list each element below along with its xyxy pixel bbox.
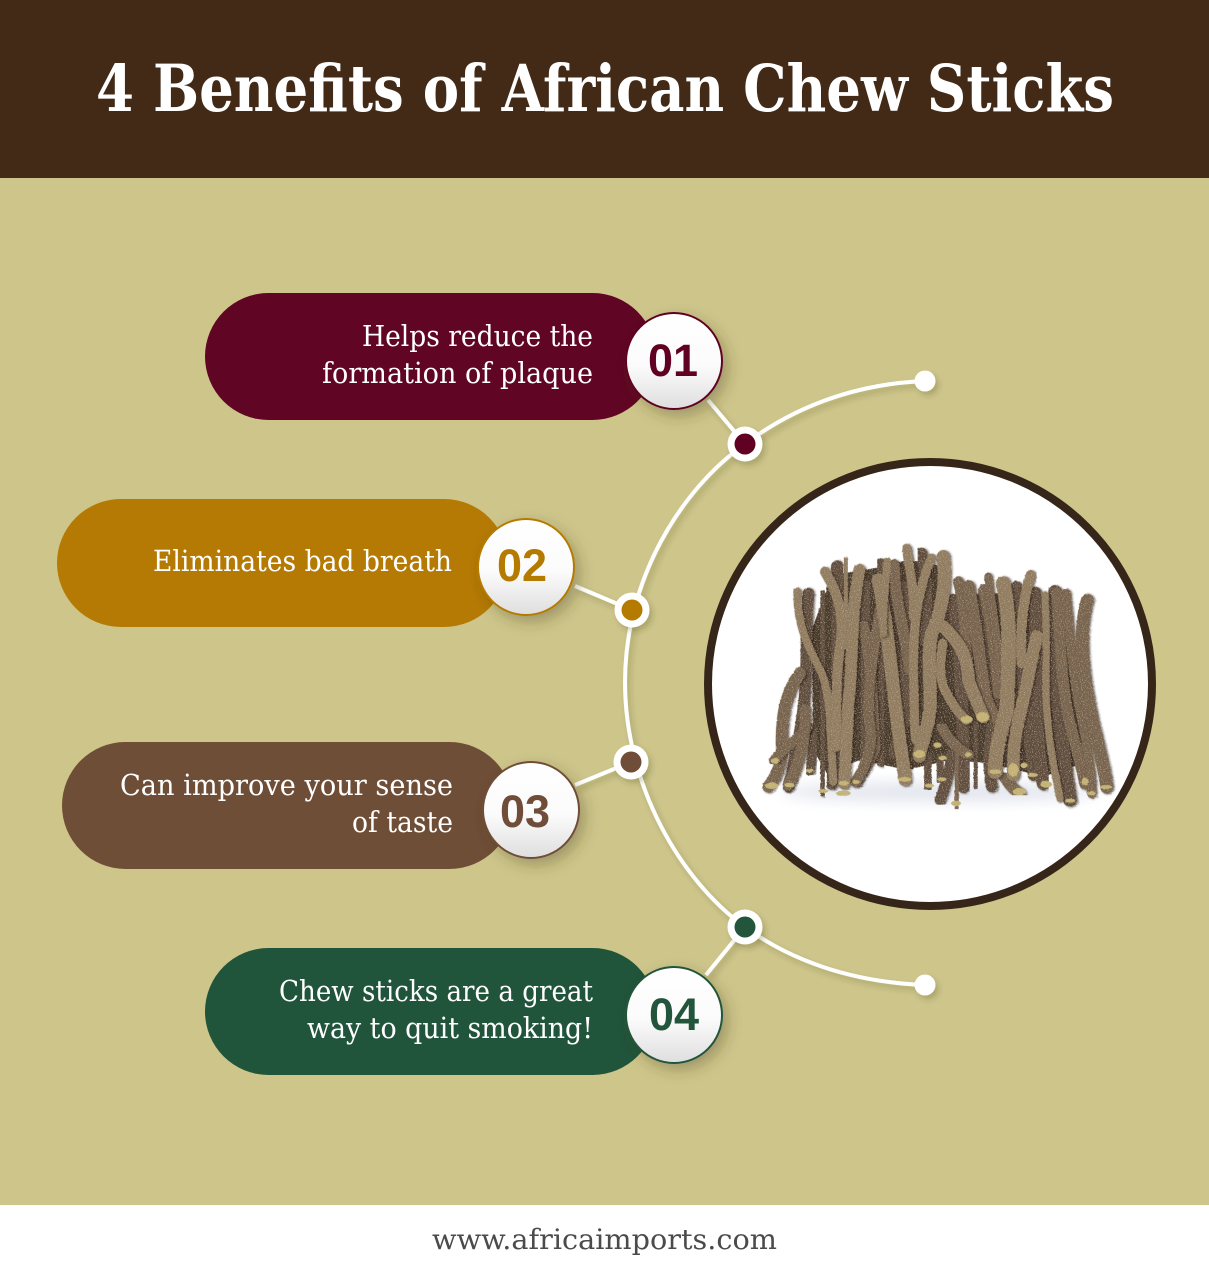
backing mass: [812, 560, 1083, 777]
number badge 02: 02: [497, 540, 547, 591]
pill 3: [62, 742, 513, 869]
benefit 1 text: formation of plaque: [322, 356, 593, 390]
panel: benefit 4: [205, 910, 762, 1075]
node 3: [614, 744, 648, 780]
number badge 04: [626, 967, 722, 1063]
node 2: [614, 592, 650, 628]
benefit 1 text: [322, 319, 593, 390]
node 1: [728, 426, 762, 462]
pill 1: [205, 293, 656, 420]
footer band: [0, 1205, 1209, 1280]
pill 4: [205, 948, 656, 1075]
benefit 2 text: Eliminates bad breath: [153, 544, 452, 578]
benefit 3 text: of taste: [352, 805, 453, 839]
node 4: [728, 910, 762, 944]
panel: benefit 3: [62, 742, 648, 869]
stick ends: [765, 712, 1112, 806]
number badge 03: 03: [500, 786, 550, 837]
panel: benefit 2: [57, 499, 650, 628]
benefit 1 text: Helps reduce the: [362, 319, 593, 353]
header band: [0, 0, 1209, 178]
number badge 04: 04: [649, 989, 699, 1040]
benefit 4 text: Chew sticks are a great: [279, 974, 593, 1008]
bundle of sticks: [765, 548, 1112, 806]
connector arc with end dots: [575, 370, 936, 996]
number badge 01: 01: [648, 335, 698, 386]
image circle: chew sticks: [708, 462, 1152, 906]
benefit 4 text: [279, 974, 593, 1045]
website url: www.africaimports.com: [432, 1223, 777, 1256]
panel: benefit 1: [205, 293, 762, 462]
number badge 03: [483, 762, 579, 858]
number badge 02: [478, 519, 574, 615]
number badge 01: [626, 313, 722, 409]
benefit 4 text: way to quit smoking!: [307, 1011, 593, 1045]
pill 2: [57, 499, 508, 627]
benefit 3 text: Can improve your sense: [120, 768, 453, 802]
benefit 3 text: [120, 768, 453, 839]
ground shadow: [780, 782, 1100, 802]
